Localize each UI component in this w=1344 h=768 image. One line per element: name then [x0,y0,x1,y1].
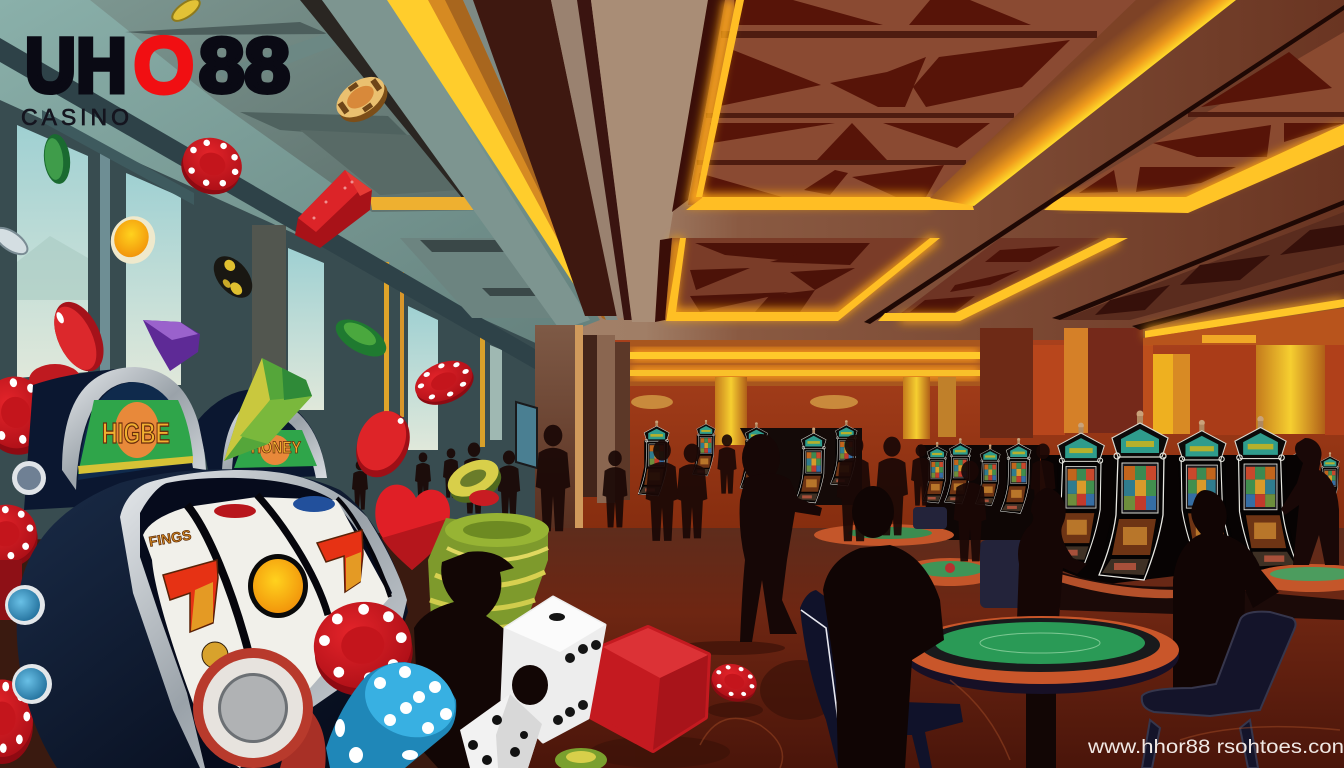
heart [375,485,450,570]
round table back [814,524,954,546]
red chip side left [44,294,114,379]
silver chip [0,223,32,259]
foreground table [905,616,1179,768]
floating green chip [41,133,73,185]
website text: www.hhor88 rsohtoes.con [1087,736,1344,758]
back row slot machines [638,420,1339,540]
left wall with windows [0,100,540,540]
floating gold coin [169,0,203,25]
slot machine 2 [1098,410,1168,580]
coffer panel top [686,0,1136,210]
white die small [460,694,542,768]
window 4 [408,306,438,450]
slot machine 4 [1235,416,1299,571]
bottom green chip [555,748,607,768]
back-right slot topper [198,389,327,480]
white die large [502,597,605,742]
left ceiling [0,0,600,345]
round table mid [900,558,1000,586]
red chip right top [409,353,480,413]
carpet swirls [700,680,1340,768]
left edge chips [0,500,42,764]
big ring button [193,648,326,768]
red chip left [0,370,57,461]
orange oval candy [104,210,162,270]
red cube die [592,628,708,750]
diagonal lit beam [930,0,1236,206]
right-hand columns [980,322,1344,438]
window 3 [288,248,324,410]
body [17,469,408,768]
panel glow [694,0,930,200]
main slot machine [5,461,408,768]
dark diagonal line [864,5,1344,324]
logo: 88 [199,23,290,109]
top-reel red symbol [214,504,256,518]
round table right [1250,564,1344,592]
right standing person [1281,438,1339,565]
back-right slot topper: HONEY [251,438,302,457]
wall screen [516,402,537,468]
standing person [740,434,822,642]
golden ball [248,554,308,618]
blue die [326,650,466,768]
chandelier right [810,395,858,409]
symbol bar: FINGS [148,526,192,550]
black and yellow chip [206,249,260,305]
left columns [535,325,630,528]
ceiling beams left [0,0,566,372]
blue button low [12,664,52,704]
red chip top [173,129,250,203]
logo subtitle: CASINO [21,104,129,130]
hand on die [512,665,548,705]
gold and green chip [442,452,507,510]
silver rim [120,470,407,768]
floor shadows [590,641,840,768]
slot machine 1 [1046,423,1104,564]
reels [143,497,390,768]
coffer panel middle [655,238,940,322]
back chair [980,540,1028,608]
red chip large [308,596,418,702]
seated person mid [1017,488,1087,620]
far right ceiling [1052,200,1344,345]
inner left coffer [90,0,488,212]
mid tables [814,507,1344,620]
front slot machines [1040,410,1310,585]
window 2 [126,173,181,385]
center tan ceiling [591,0,708,322]
silver button top [12,461,46,495]
logo [21,23,290,130]
slot machine 3 [1178,420,1238,566]
right foreground chair [1142,612,1296,768]
seven right [317,530,363,592]
golden ceiling strip and dark beam [322,0,632,330]
left foreground chair [800,590,963,768]
floor [440,528,1344,768]
red chip right [345,403,420,486]
small red chip on floor [706,658,761,707]
window 1 [17,125,88,378]
logo wordmark: UH [25,23,127,109]
top-reel blue symbol [293,496,335,512]
person in cap [414,551,548,768]
floating orange chip [329,69,395,131]
inner shadow [140,478,392,768]
seated person right [1173,490,1279,690]
green chip stack [428,513,549,640]
back-left slot topper [24,367,206,510]
chandelier left [631,395,673,409]
large green gem [224,358,312,461]
logo: O [135,24,193,107]
foreground person centre [823,486,944,768]
small red chip [469,490,499,506]
back-left slot topper: HIGBE [102,418,170,450]
lower symbol [202,642,228,668]
blue button large [5,585,45,625]
green gem right [330,312,392,364]
crowd silhouettes [352,425,1055,561]
purple gem [143,320,200,371]
reel separators [187,505,248,650]
coffer panel side [878,238,1128,321]
red die flying [295,170,372,248]
back wall [560,340,1344,540]
red chip far left behind [29,364,81,396]
seven left [163,560,218,632]
coffer panel upper right [1044,32,1344,213]
